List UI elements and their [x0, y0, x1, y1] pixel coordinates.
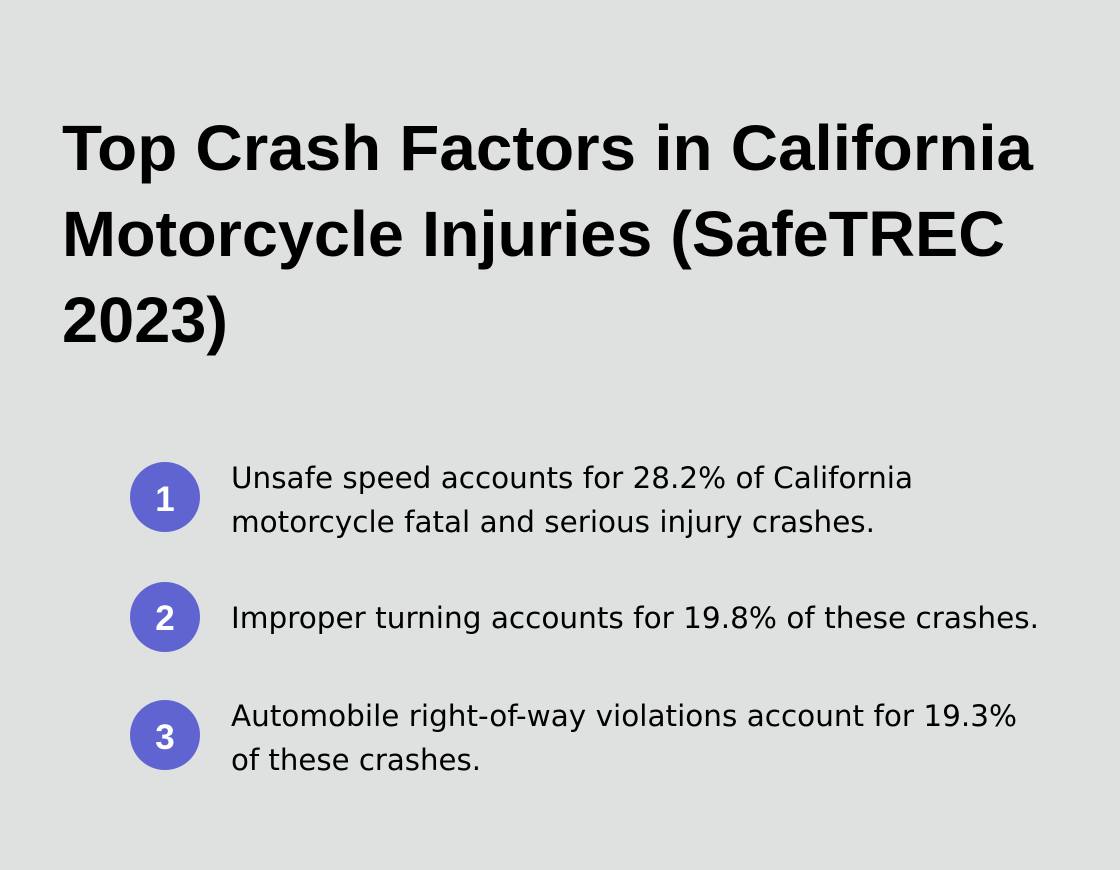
icon: number badge 2: 2 — [155, 599, 175, 638]
icon: number badge 3: 3 — [155, 718, 175, 757]
text: right-of-way violations: Automobile right-of-way violations account for 19.3% — [231, 699, 1017, 733]
icon: number badge 2 — [130, 582, 200, 652]
icon: number badge 1: 1 — [155, 480, 175, 519]
text: improper turning: Improper turning accounts for 19.8% of these crashes. — [231, 601, 1039, 635]
title — [62, 112, 1033, 356]
text: right-of-way violations: of these crashes. — [231, 743, 481, 777]
list item 3 — [130, 699, 1017, 777]
text: unsafe speed: motorcycle fatal and serious injury crashes. — [231, 505, 875, 539]
title: Top Crash Factors in California — [62, 112, 1033, 184]
text: unsafe speed — [231, 461, 913, 539]
list item 2 — [130, 582, 1039, 652]
list item 1 — [130, 461, 913, 539]
text: right-of-way violations — [231, 699, 1017, 777]
text: unsafe speed: Unsafe speed accounts for 28.2% of California — [231, 461, 913, 495]
icon: number badge 1 — [130, 462, 200, 532]
icon: number badge 3 — [130, 700, 200, 770]
title: Motorcycle Injuries (SafeTREC — [62, 198, 1005, 270]
title: 2023) — [62, 284, 228, 356]
